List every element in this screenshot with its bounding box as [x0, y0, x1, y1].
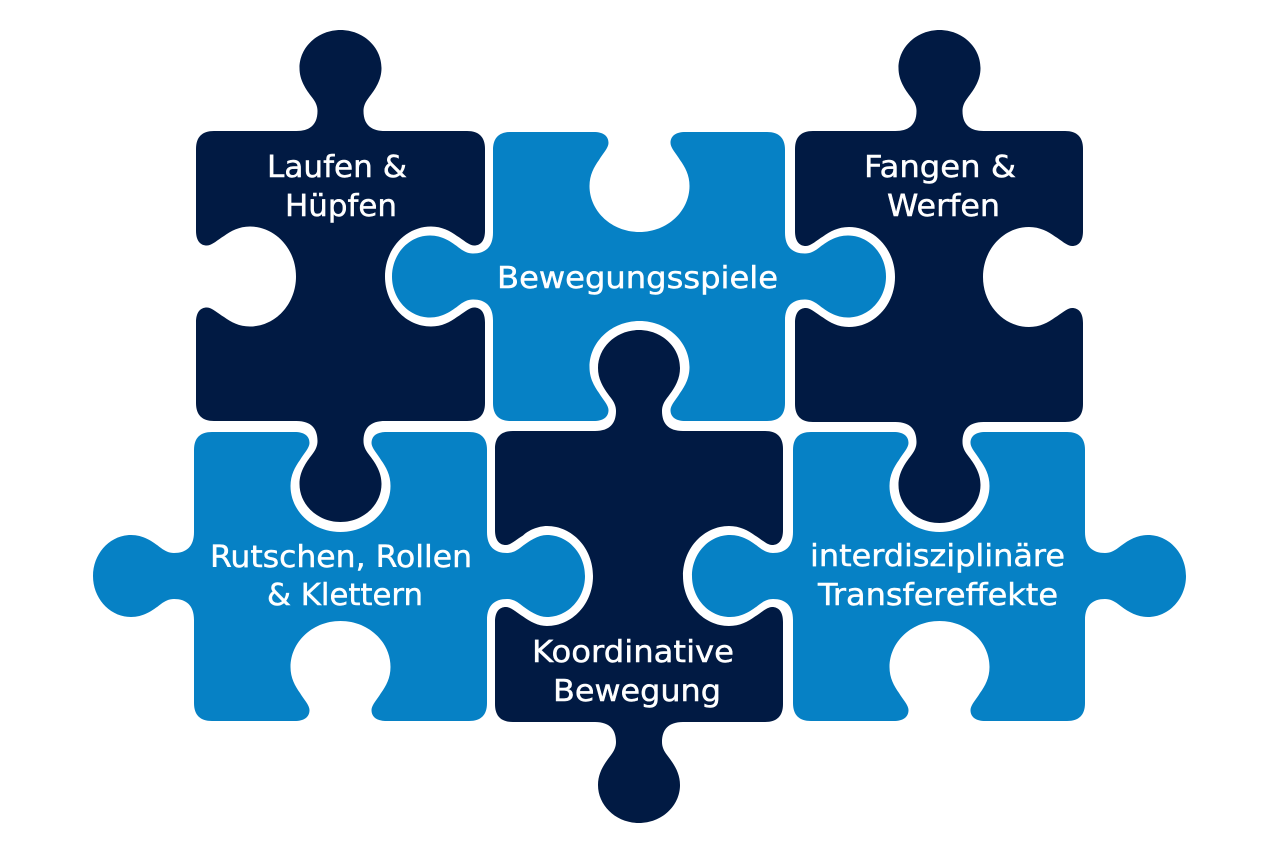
piece shape: blue — [93, 432, 585, 721]
label: Rutschen, Rollen & Klettern: Rutschen, Rollen — [210, 540, 472, 575]
label: interdisziplinäre Transfereffekte: interdisziplinäre — [810, 539, 1065, 574]
label: interdisziplinäre Transfereffekte: Transfereffekte — [817, 578, 1058, 613]
label: Fangen & Werfen: Werfen — [887, 189, 1000, 224]
label: Laufen & Hüpfen — [267, 150, 407, 224]
label: Bewegungsspiele: Bewegungsspiele — [497, 261, 778, 296]
panel: Laufen & Hüpfen puzzle piece — [196, 30, 485, 522]
label: Fangen & Werfen — [864, 150, 1016, 224]
piece shape: blue — [392, 132, 886, 421]
panel: interdisziplinäre Transfereffekte puzzle piece — [692, 432, 1186, 721]
label: Laufen & Hüpfen: Hüpfen — [285, 189, 397, 224]
label: Rutschen, Rollen & Klettern — [210, 540, 472, 613]
panel: Bewegungsspiele puzzle piece — [392, 132, 886, 421]
label: Fangen & Werfen: Fangen & — [864, 150, 1016, 185]
label: Koordinative Bewegung: Koordinative — [532, 635, 734, 670]
piece shape: blue — [692, 432, 1186, 721]
panel: Rutschen, Rollen & Klettern puzzle piece — [93, 432, 585, 721]
piece shape: dark navy — [495, 330, 783, 823]
panel: Koordinative Bewegung puzzle piece — [495, 330, 783, 823]
label: Koordinative Bewegung — [532, 635, 734, 709]
label: Rutschen, Rollen & Klettern: & Klettern — [267, 578, 423, 613]
piece shape: dark navy — [795, 30, 1083, 523]
piece shape: dark navy — [196, 30, 485, 522]
label: Laufen & Hüpfen: Laufen & — [267, 150, 407, 185]
label: Koordinative Bewegung: Bewegung — [553, 674, 721, 709]
label: interdisziplinäre Transfereffekte — [810, 539, 1065, 613]
panel: Fangen & Werfen puzzle piece — [795, 30, 1083, 523]
